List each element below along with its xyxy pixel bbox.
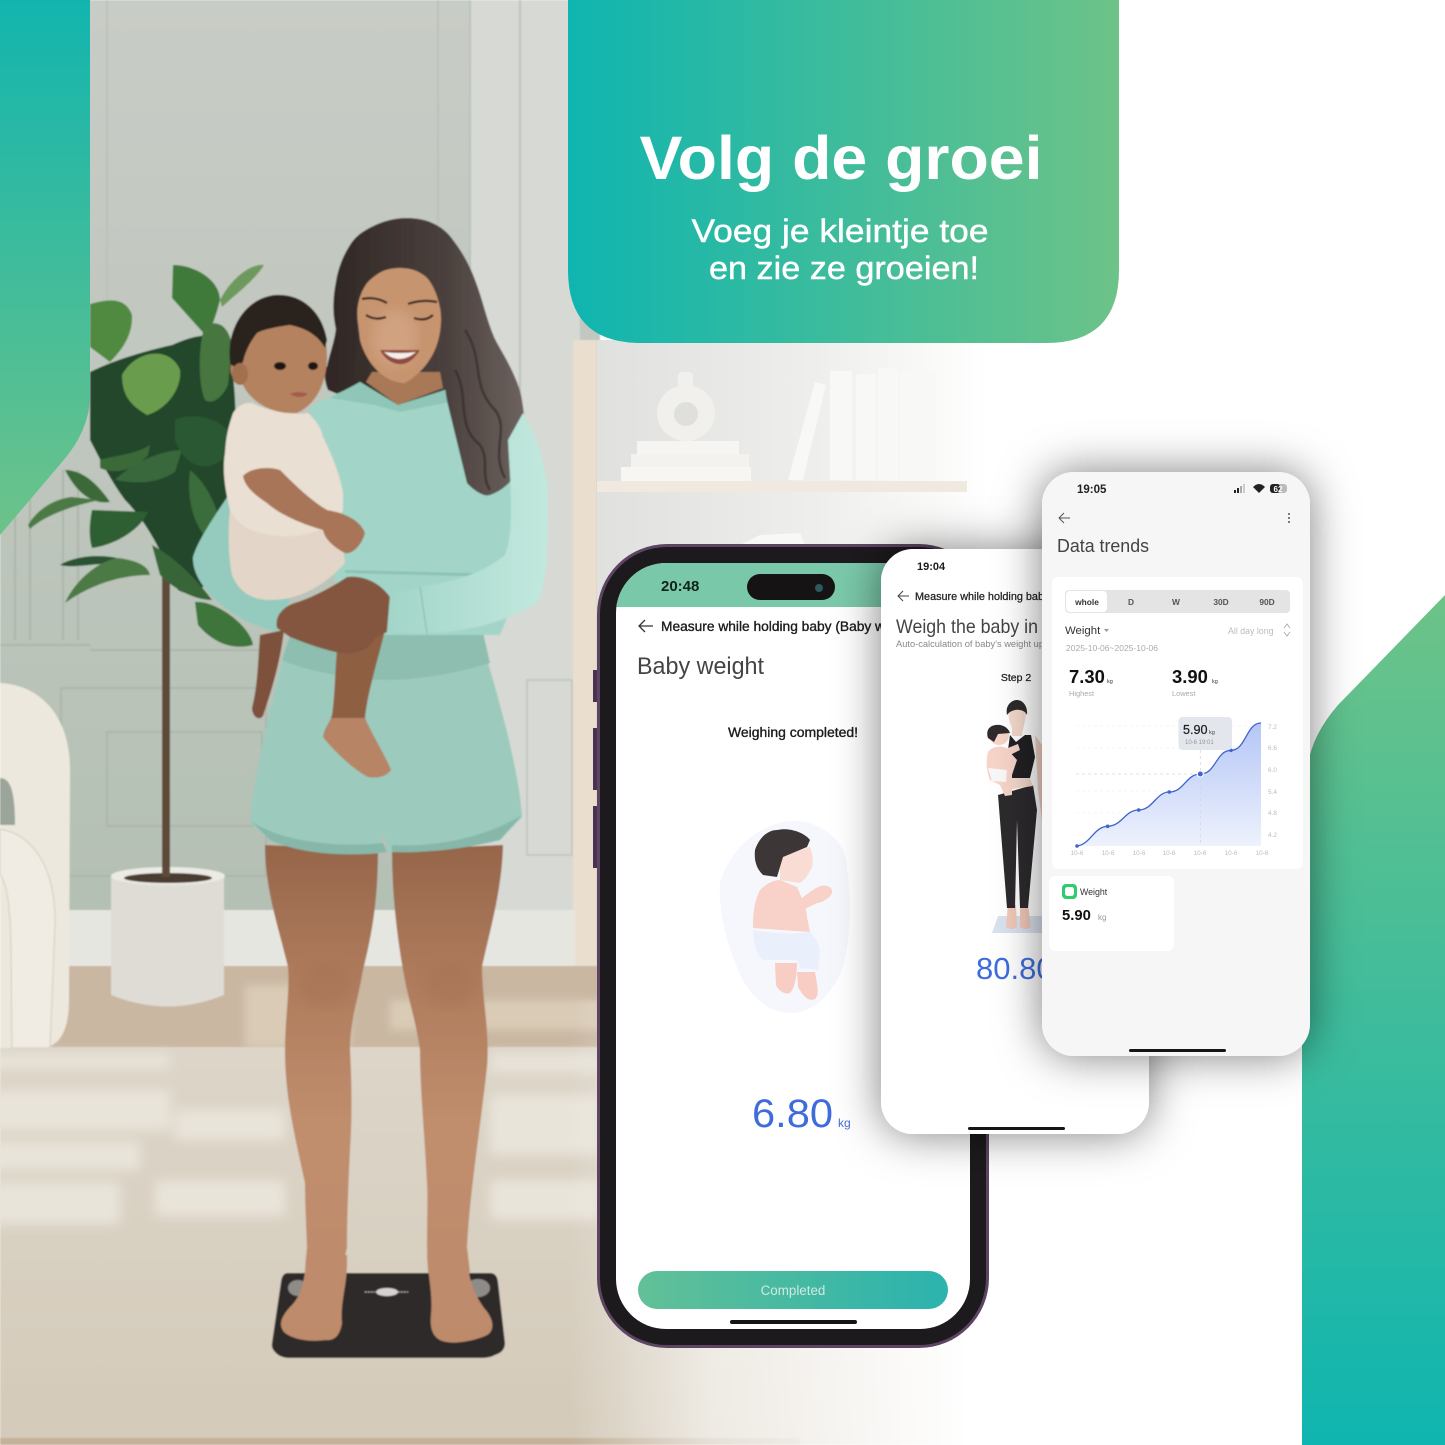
- y axis labels: 4.8: [1268, 810, 1277, 817]
- neck: [366, 372, 443, 405]
- phone 3: data trends: [1042, 472, 1310, 1056]
- trunk: [162, 570, 170, 877]
- trends card: [1052, 577, 1303, 869]
- body: [753, 880, 810, 932]
- woman holding baby illustration: [986, 700, 1042, 933]
- description: Auto-calculation of baby's weight up: [896, 639, 1044, 649]
- time: 19:05: [1077, 484, 1107, 496]
- right gradient shape: [1302, 595, 1445, 1445]
- back arrow: [898, 591, 909, 601]
- tooltip: 5.90: [1183, 723, 1208, 737]
- vase: [657, 372, 715, 441]
- cuff line: [420, 587, 427, 633]
- background photo: mother holding baby on a scale: [0, 0, 970, 1445]
- icon: scale: [1062, 884, 1077, 899]
- rug fade to white: [570, 1000, 970, 1445]
- home indicator: [1129, 1049, 1226, 1052]
- baby face: [274, 362, 286, 370]
- weight reading: 6.80: [752, 1092, 833, 1136]
- mother's near arm: [387, 413, 548, 633]
- heading: Data trends: [1057, 535, 1149, 556]
- hood: [330, 382, 450, 412]
- baby head: [230, 308, 327, 413]
- face: [357, 268, 441, 383]
- face: [780, 847, 813, 883]
- range tabs: W: [1172, 597, 1180, 607]
- pot: [111, 876, 224, 1006]
- nav title: Measure while holding baby (Baby w: [661, 619, 885, 634]
- x axis labels: 10-6: [1256, 850, 1269, 857]
- phone 2: weigh the baby step: [881, 549, 1149, 1134]
- highest stat: Highest: [1069, 689, 1094, 698]
- baby illustration: [720, 821, 850, 1013]
- baby shorts and tee: [229, 510, 345, 600]
- hair waves: [455, 330, 505, 490]
- rug edge strip: [0, 1438, 800, 1445]
- arm: [800, 885, 832, 910]
- leaves: [28, 265, 264, 647]
- scale: [272, 1273, 505, 1358]
- sunlight on rug: [0, 1054, 600, 1224]
- items behind the phone: [740, 533, 805, 545]
- weight reading: kg: [838, 1116, 851, 1130]
- wall panels: [0, 0, 572, 876]
- left gradient shape: [0, 0, 90, 535]
- hair behind: [325, 218, 525, 495]
- status icons: 62: [1274, 485, 1283, 494]
- rug: [0, 1047, 970, 1445]
- back arrow: [639, 620, 653, 632]
- lowest stat: 3.90: [1172, 666, 1208, 687]
- baby near leg: [323, 630, 391, 777]
- woman: [193, 218, 548, 1358]
- baby: [987, 746, 1017, 796]
- x axis labels: [1071, 850, 1269, 857]
- knee shading: [299, 963, 476, 1007]
- lowest stat: Lowest: [1172, 689, 1195, 698]
- tooltip: [1178, 717, 1232, 750]
- highest stat: 7.30: [1069, 666, 1105, 687]
- range tabs: whole: [1074, 597, 1099, 607]
- baby hair: [229, 295, 327, 366]
- nav title: Measure while holding bab: [915, 591, 1044, 603]
- shorts waistband: [282, 628, 490, 680]
- date range: 2025-10-06~2025-10-06: [1066, 644, 1158, 653]
- completed button: [638, 1271, 948, 1309]
- shorts: [250, 635, 522, 854]
- wooden floor: [0, 966, 600, 1048]
- stacked books: [621, 441, 751, 481]
- weight summary card: 5.90: [1062, 908, 1091, 924]
- subtitle: Voeg je kleintje toe: [692, 213, 988, 249]
- back arrow: [1059, 513, 1070, 523]
- status icons: [1234, 484, 1287, 494]
- metric selector: Weight: [1065, 625, 1101, 637]
- x axis labels: 10-6: [1225, 850, 1238, 857]
- head: [1008, 710, 1026, 736]
- scale: [992, 916, 1042, 933]
- tooltip: 10-6 19:01: [1185, 740, 1214, 746]
- baby arm: [243, 468, 365, 553]
- weight summary card: Weight: [1080, 887, 1108, 897]
- range tabs: [1065, 590, 1290, 613]
- line chart: [1071, 717, 1277, 857]
- feet: [1006, 905, 1031, 929]
- subtitle: [692, 213, 988, 286]
- baseboard: [0, 910, 575, 966]
- highest stat: [1069, 666, 1113, 698]
- smile: [380, 350, 420, 364]
- lowest stat: [1172, 666, 1218, 698]
- highest stat: kg: [1107, 679, 1113, 685]
- plant: [28, 265, 264, 1006]
- y axis labels: 7.2: [1268, 724, 1277, 731]
- home indicator: [730, 1320, 857, 1324]
- bookcase post: [573, 340, 597, 1000]
- baby far leg: [252, 630, 284, 718]
- header panel: [568, 0, 1119, 343]
- x axis labels: 10-6: [1163, 850, 1176, 857]
- shorts hem shading: [251, 815, 522, 854]
- time: 19:04: [917, 561, 946, 573]
- hair: [755, 829, 810, 877]
- range tabs: D: [1128, 597, 1134, 607]
- weight reading: 80.80: [976, 951, 1054, 986]
- x axis labels: 10-6: [1194, 850, 1207, 857]
- legs: [775, 963, 797, 993]
- mother's far arm: [193, 490, 290, 632]
- baby: [224, 295, 391, 777]
- tooltip: kg: [1209, 730, 1215, 736]
- subtitle: en zie ze groeien!: [709, 250, 979, 286]
- dynamic island: [747, 574, 835, 600]
- y axis labels: 6.6: [1268, 745, 1277, 752]
- completed button: Completed: [761, 1283, 825, 1298]
- status bar: [616, 563, 886, 607]
- phone frame: [597, 544, 989, 1348]
- time: 20:48: [661, 578, 699, 595]
- metric selector: All day long: [1228, 626, 1274, 636]
- y axis labels: [1268, 724, 1277, 839]
- menu dots: [1288, 513, 1290, 523]
- lowest stat: kg: [1212, 679, 1218, 685]
- standing books: [788, 368, 936, 480]
- weight summary card: [1049, 876, 1174, 951]
- midriff: [1012, 778, 1033, 789]
- phone 1: baby weight result: [593, 544, 989, 1348]
- upper shelf area fading to white: [597, 340, 990, 620]
- x axis labels: 10-6: [1133, 850, 1146, 857]
- y axis labels: 5.4: [1268, 789, 1277, 796]
- x axis labels: 10-6: [1102, 850, 1115, 857]
- armchair: [0, 683, 70, 1048]
- dark foliage mass: [90, 336, 236, 593]
- legs: [265, 845, 378, 1270]
- weight summary card: kg: [1098, 913, 1106, 922]
- heading: Weigh the baby in: [896, 616, 1038, 638]
- mother's hands: [277, 577, 390, 653]
- diaper: [753, 930, 820, 970]
- x axis labels: 10-6: [1071, 850, 1084, 857]
- title: Volg de groei: [640, 124, 1042, 192]
- arm: [1035, 735, 1042, 819]
- metric selector: [1065, 624, 1290, 637]
- top: [1008, 735, 1035, 778]
- feet: [281, 1255, 347, 1341]
- heading: Baby weight: [637, 653, 764, 680]
- range tabs: 30D: [1213, 597, 1229, 607]
- wall: [0, 0, 600, 970]
- weight reading: [754, 1099, 850, 1130]
- hair: [1007, 700, 1027, 715]
- y axis labels: 4.2: [1268, 832, 1277, 839]
- screen: [616, 563, 970, 1329]
- shelf board: [597, 481, 967, 492]
- home indicator: [968, 1127, 1065, 1130]
- step label: Step 2: [1001, 672, 1031, 684]
- hair front: [327, 218, 524, 495]
- range tabs: 90D: [1259, 597, 1275, 607]
- y axis labels: 6.0: [1268, 767, 1277, 774]
- eyes and brows: [362, 298, 437, 304]
- status message: Weighing completed!: [728, 725, 858, 740]
- hoodie body: [310, 382, 518, 635]
- pants: [998, 785, 1037, 908]
